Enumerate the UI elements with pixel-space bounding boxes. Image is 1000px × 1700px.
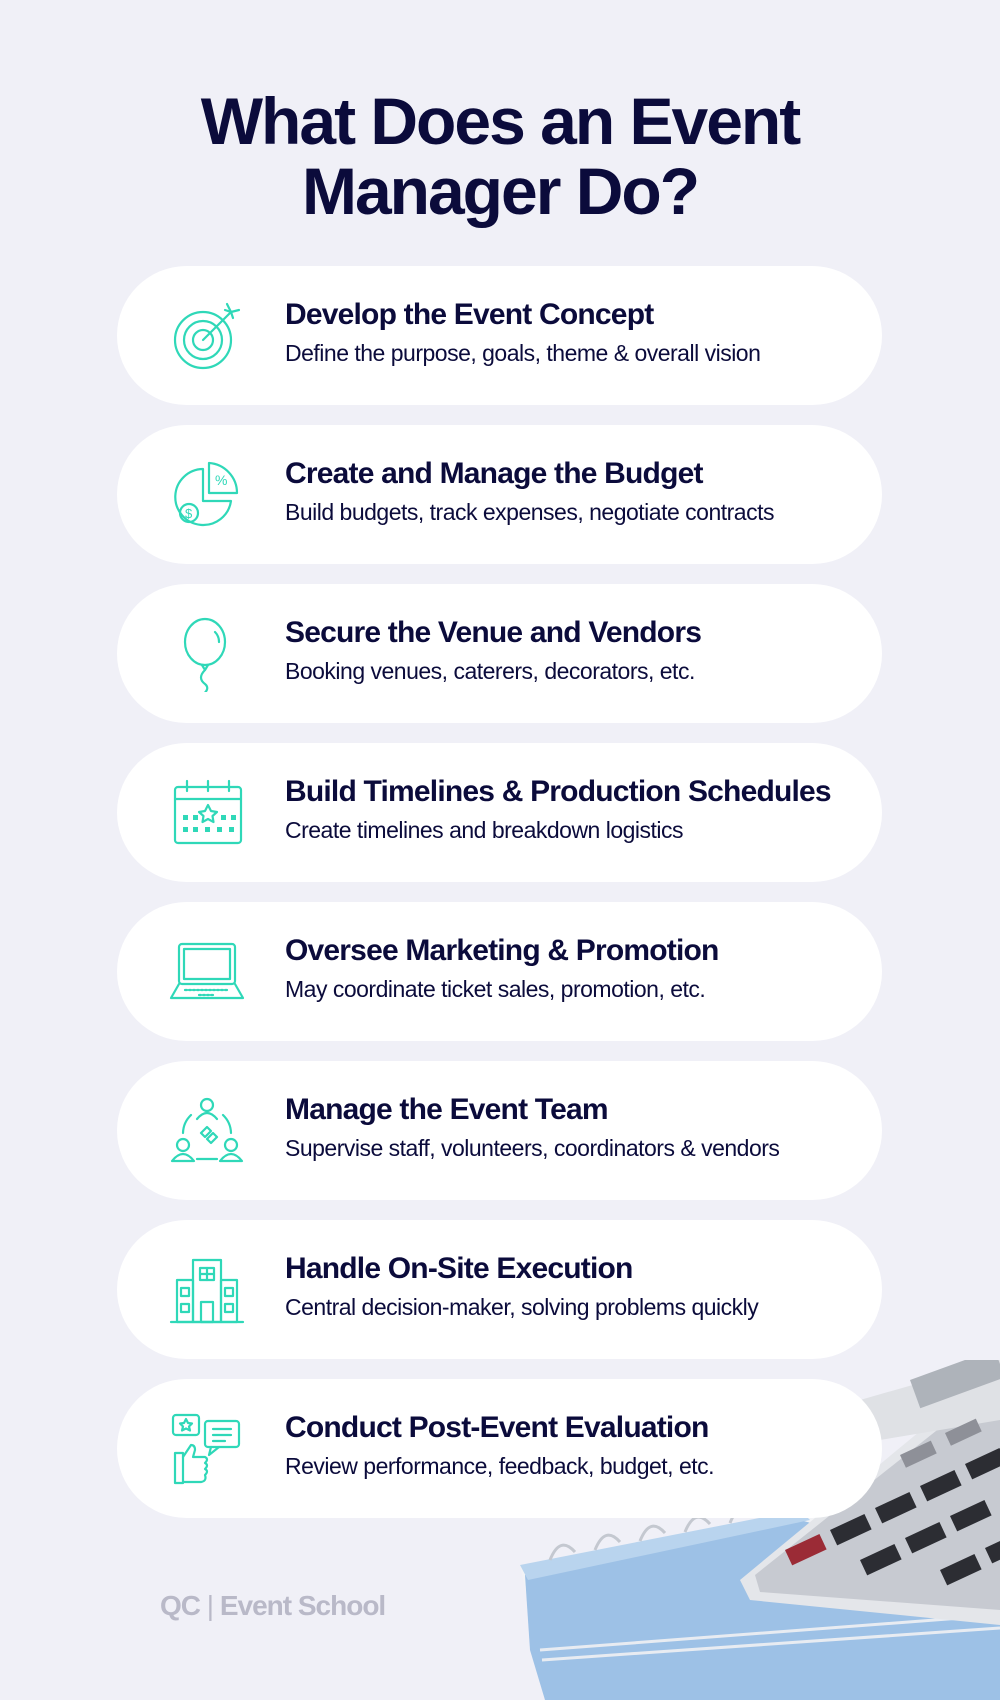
icon: team people [170, 1098, 244, 1162]
icon: laptop [170, 942, 244, 1000]
card: budget [117, 425, 882, 564]
card: timelines: Build Timelines & Production Schedules [285, 775, 831, 808]
icon: pie chart with money [174, 462, 238, 526]
card: team: Supervise staff, volunteers, coordinators & vendors [285, 1135, 779, 1161]
icon: feedback thumbs up [172, 1414, 240, 1484]
card: develop concept: Define the purpose, goals, theme & overall vision [285, 340, 760, 366]
card: venue [117, 584, 882, 723]
card: evaluation: Review performance, feedback, budget, etc. [285, 1453, 714, 1479]
card: on-site [117, 1220, 882, 1359]
icon: target [174, 302, 240, 370]
card: develop concept [117, 266, 882, 405]
title [200, 84, 800, 228]
card: on-site: Central decision-maker, solving problems quickly [285, 1294, 758, 1320]
card: venue: Booking venues, caterers, decorators, etc. [285, 658, 695, 684]
card: on-site: Handle On-Site Execution [285, 1252, 633, 1285]
card: budget: Create and Manage the Budget [285, 457, 703, 490]
card: marketing [117, 902, 882, 1041]
card: marketing: Oversee Marketing & Promotion [285, 934, 719, 967]
icon: calendar [174, 780, 242, 844]
card: team: Manage the Event Team [285, 1093, 608, 1126]
title: Manager Do? [302, 154, 698, 228]
card: timelines: Create timelines and breakdown logistics [285, 817, 683, 843]
icon: pie chart with money: % [215, 472, 227, 488]
icon: pie chart with money: $ [185, 506, 193, 521]
icon: balloon [184, 618, 226, 692]
card: timelines [117, 743, 882, 882]
card: budget: Build budgets, track expenses, negotiate contracts [285, 499, 774, 525]
card: evaluation: Conduct Post-Event Evaluation [285, 1411, 709, 1444]
card: marketing: May coordinate ticket sales, promotion, etc. [285, 976, 705, 1002]
card: team [117, 1061, 882, 1200]
card: develop concept: Develop the Event Concept [285, 298, 653, 331]
icon: building [170, 1258, 244, 1324]
card: venue: Secure the Venue and Vendors [285, 616, 701, 649]
decorative photo: notebook and calculator [520, 1360, 1000, 1700]
title: What Does an Event [201, 84, 799, 158]
footer logo: QC | Event School [160, 1590, 385, 1621]
card: evaluation [117, 1379, 882, 1518]
